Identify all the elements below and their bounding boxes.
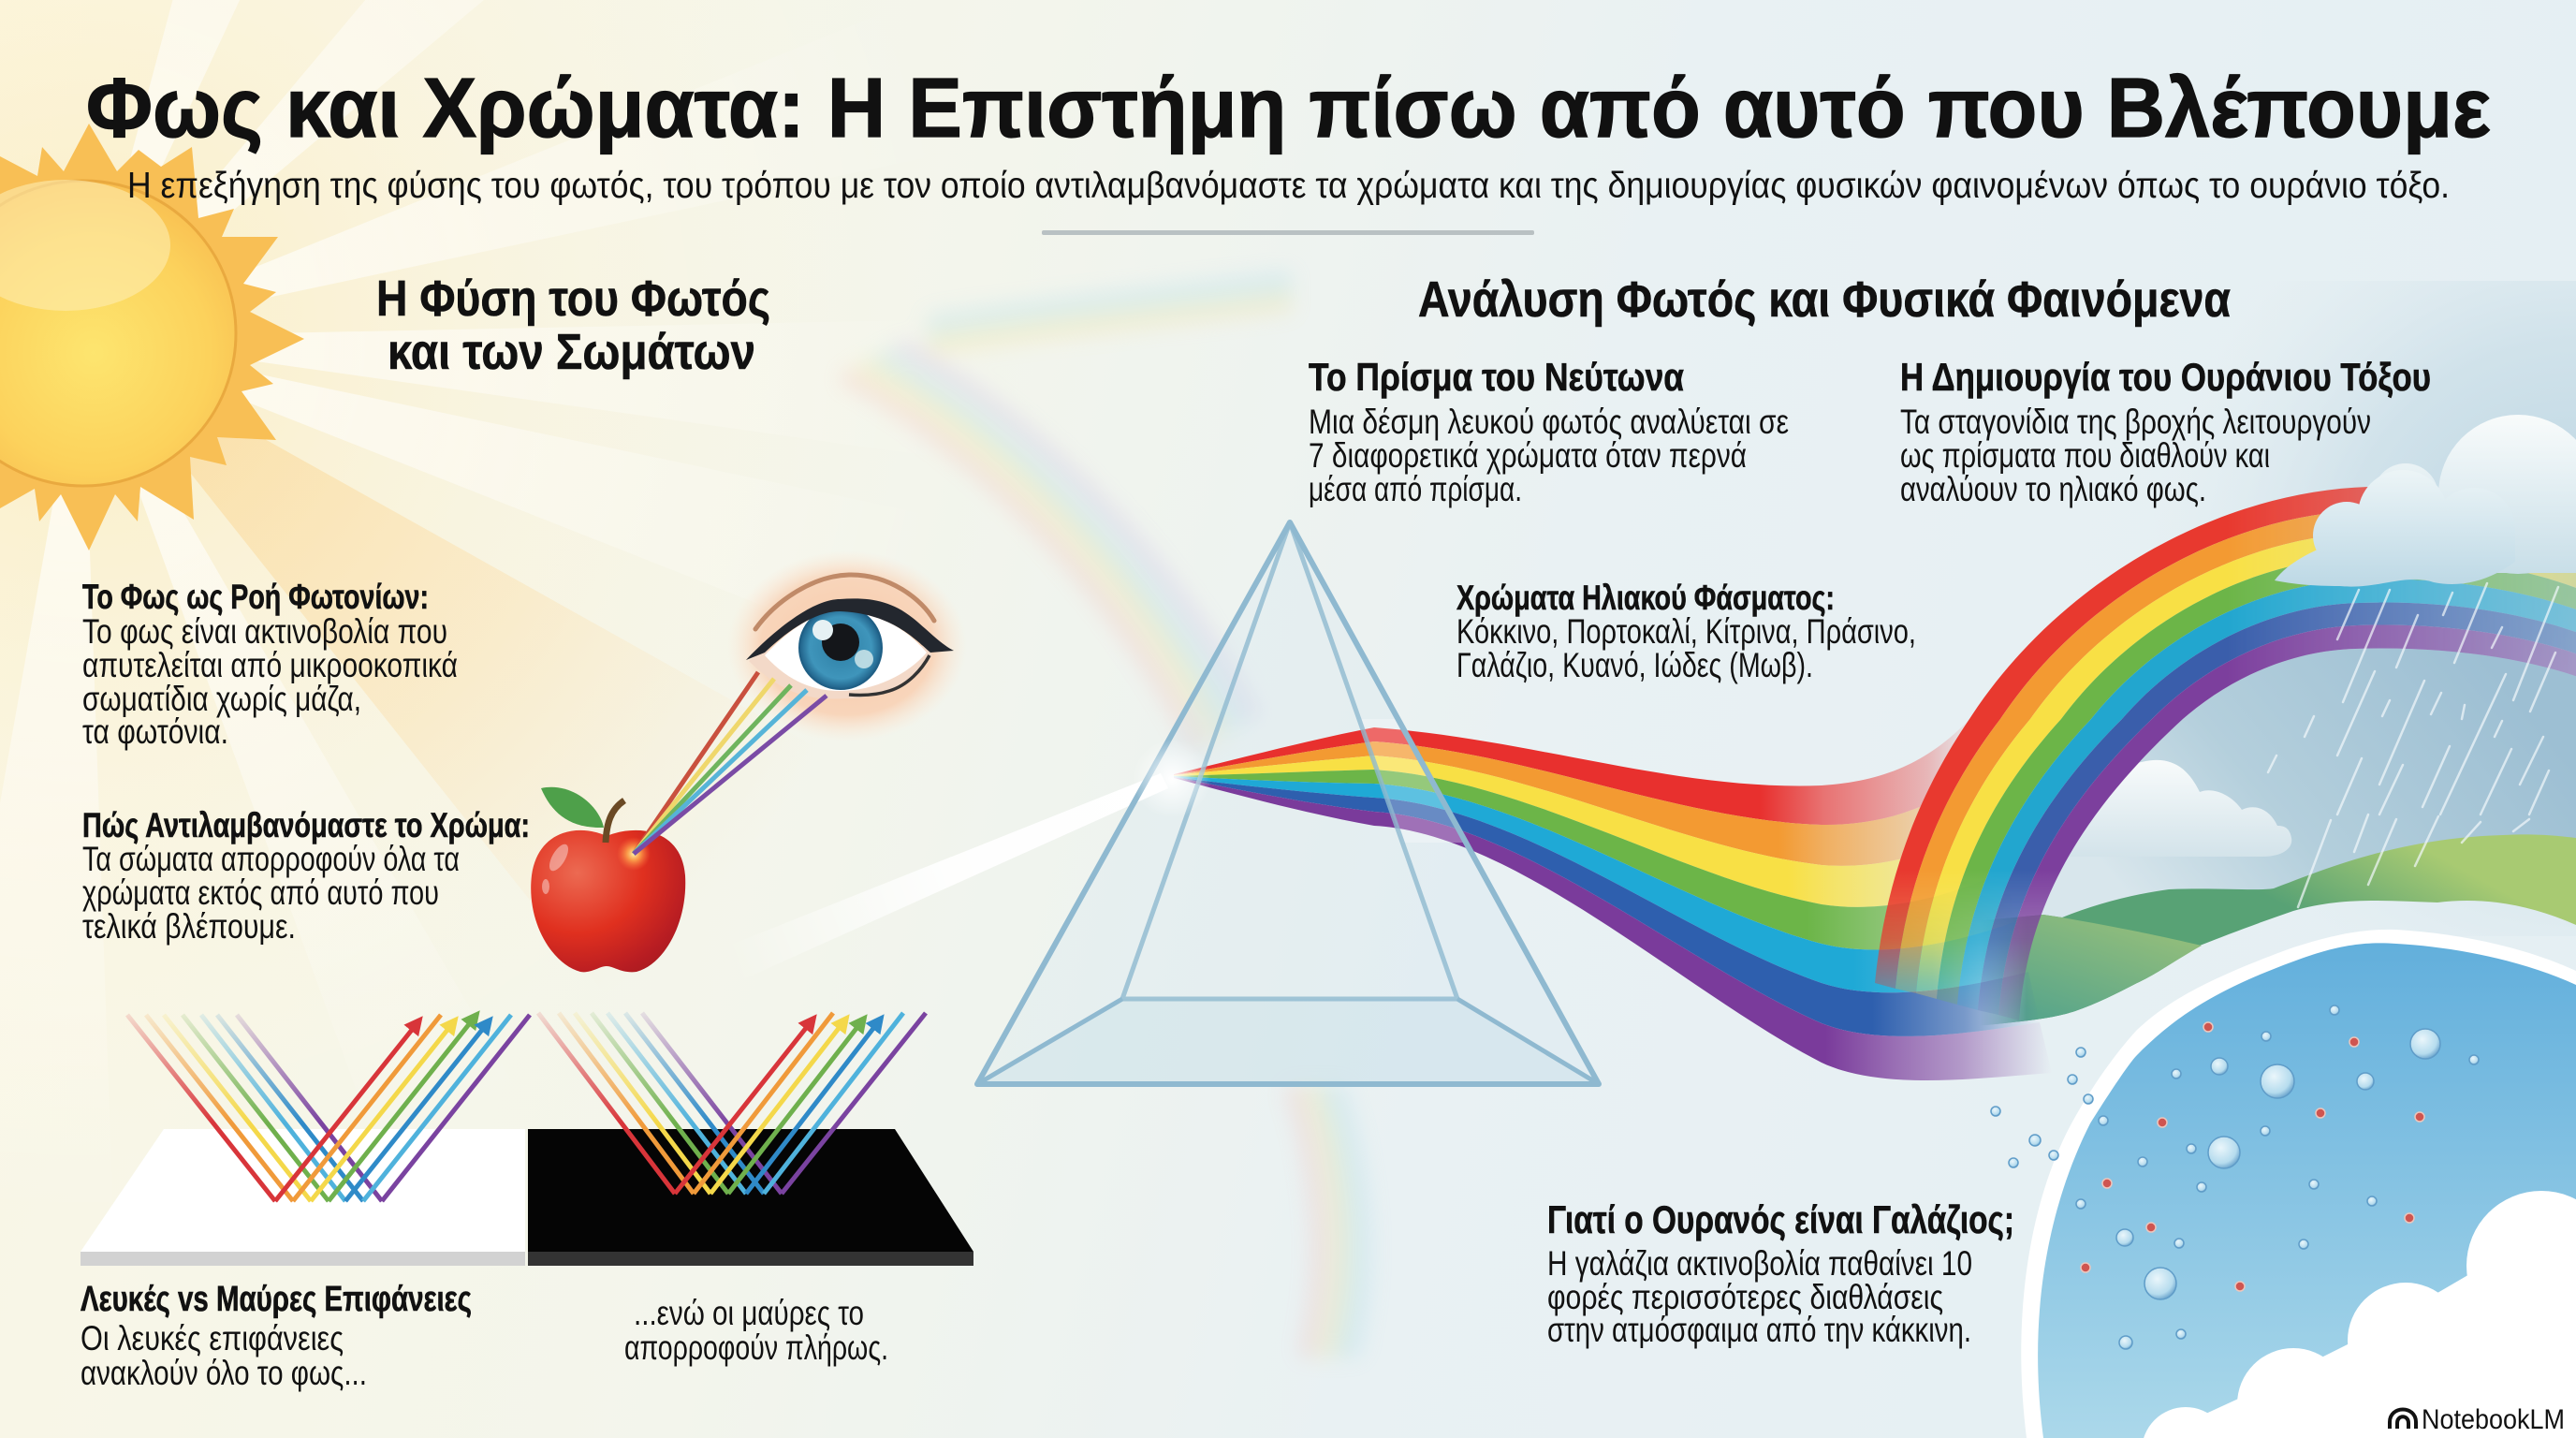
text block: why is the sky blue: στην ατμόσφαιμα από την κάκκινη. <box>1547 1311 1971 1349</box>
panel: why the sky is blue <box>1991 930 2576 1438</box>
icon: hills <box>1966 834 2576 1027</box>
icon: storm cloud <box>2275 415 2576 587</box>
text block: colour perception <box>82 806 530 946</box>
text block: photons: Το φως είναι ακτινοβολία που <box>82 612 447 651</box>
icon: light beam into prism <box>698 773 1168 981</box>
icon: glass prism body <box>977 522 1599 1084</box>
text block: creation of rainbow <box>1900 355 2431 508</box>
text block: spectrum colours: Γαλάζιο, Κυανό, Ιώδες (Μωβ). <box>1456 646 1813 684</box>
text block: Newton's prism: 7 διαφορετικά χρώματα όταν περνά <box>1309 436 1747 475</box>
text block: creation of rainbow: αναλύουν το ηλιακό φως. <box>1900 470 2206 508</box>
text block: spectrum colours: Κόκκινο, Πορτοκαλί, Κίτρινα, Πράσινο, <box>1456 612 1916 651</box>
icon: glass prism edges <box>977 522 1599 1084</box>
arrow: rainbow rays from apple to eye <box>634 672 827 854</box>
heading: analysis: Ανάλυση Φωτός και Φυσικά Φαινόμενα <box>1418 271 2231 328</box>
text block: colour perception: χρώματα εκτός από αυτό που <box>82 873 439 912</box>
icon: apple <box>531 787 685 972</box>
text block: creation of rainbow: Τα σταγονίδια της βροχής λειτουργούν <box>1900 403 2371 441</box>
sun rays <box>0 0 1009 1273</box>
text block: creation of rainbow: ως πρίσματα που διαθλούν και <box>1900 436 2270 475</box>
text block: why is the sky blue: Η γαλάζια ακτινοβολία παθαίνει 10 <box>1547 1244 1972 1283</box>
text block: photons: Το Φως ως Ροή Φωτονίων: <box>82 578 429 616</box>
text block: colour perception: Πώς Αντιλαμβανόμαστε το Χρώμα: <box>82 806 530 844</box>
text block: surfaces: ...ενώ οι μαύρες το <box>634 1294 864 1332</box>
chart: reflection rays on black surface <box>538 1013 926 1194</box>
text block: why is the sky blue: φορές περισσότερες διαθλάσεις <box>1547 1278 1943 1316</box>
text block: surfaces: Οι λευκές επιφάνειες <box>80 1319 344 1357</box>
text block: Newton's prism: Το Πρίσμα του Νεύτωνα <box>1309 355 1684 399</box>
heading: nature of light: Η Φύση του Φωτός <box>376 271 770 327</box>
chart: reflection rays on white surface <box>127 1015 530 1201</box>
text block: Newton's prism: μέσα από πρίσμα. <box>1309 470 1522 508</box>
heading: nature of light: και των Σωμάτων <box>388 324 755 380</box>
faint background rainbows <box>842 278 1364 1357</box>
icon: eye <box>727 550 967 741</box>
text block: why is the sky blue <box>1547 1197 2014 1349</box>
icon: white surface <box>80 1129 525 1266</box>
text block: photons <box>82 578 458 751</box>
icon: large droplets <box>1991 1005 2479 1349</box>
title: Φως και Χρώματα: Η Επιστήμη πίσω από αυτό που Βλέπουμε <box>86 62 2491 155</box>
text block: why is the sky blue: Γιατί ο Ουρανός είναι Γαλάζιος; <box>1547 1197 2014 1241</box>
text block: spectrum colours <box>1456 579 1916 684</box>
icon: clouds in circle <box>2142 1191 2576 1438</box>
text block: photons: απυτελείται από μικροοκοπικά <box>82 646 458 684</box>
text block: Newton's prism <box>1309 355 1789 508</box>
icon: white background cloud <box>2050 760 2291 857</box>
text block: colour perception: Τα σώματα απορροφούν όλα τα <box>82 840 460 878</box>
text block: surfaces: Λευκές vs Μαύρες Επιφάνειες <box>80 1280 472 1319</box>
icon: red particles <box>2081 1022 2424 1291</box>
icon: black surface <box>528 1129 973 1266</box>
sky behind rainbow <box>2019 281 2576 1020</box>
chart: rainbow arch <box>1875 487 2576 1020</box>
text block: photons: τα φωτόνια. <box>82 712 228 751</box>
text block: spectrum colours: Χρώματα Ηλιακού Φάσματος: <box>1456 579 1835 617</box>
heading: nature of light <box>376 271 770 380</box>
text block: colour perception: τελικά βλέπουμε. <box>82 907 296 946</box>
text block: Newton's prism: Μια δέσμη λευκού φωτός αναλύεται σε <box>1309 403 1789 441</box>
text block: photons: σωματίδια χωρίς μάζα, <box>82 680 361 718</box>
icon: sun <box>0 124 304 550</box>
chart: spectrum ribbon <box>1174 719 2052 1080</box>
text block: surfaces <box>80 1280 888 1392</box>
text block: surfaces: απορροφούν πλήρως. <box>624 1328 888 1367</box>
text block: creation of rainbow: Η Δημιουργία του Ουράνιου Τόξου <box>1900 355 2431 399</box>
icon: rain streaks <box>2268 583 2558 907</box>
text block: surfaces: ανακλούν όλο το φως... <box>80 1354 367 1392</box>
